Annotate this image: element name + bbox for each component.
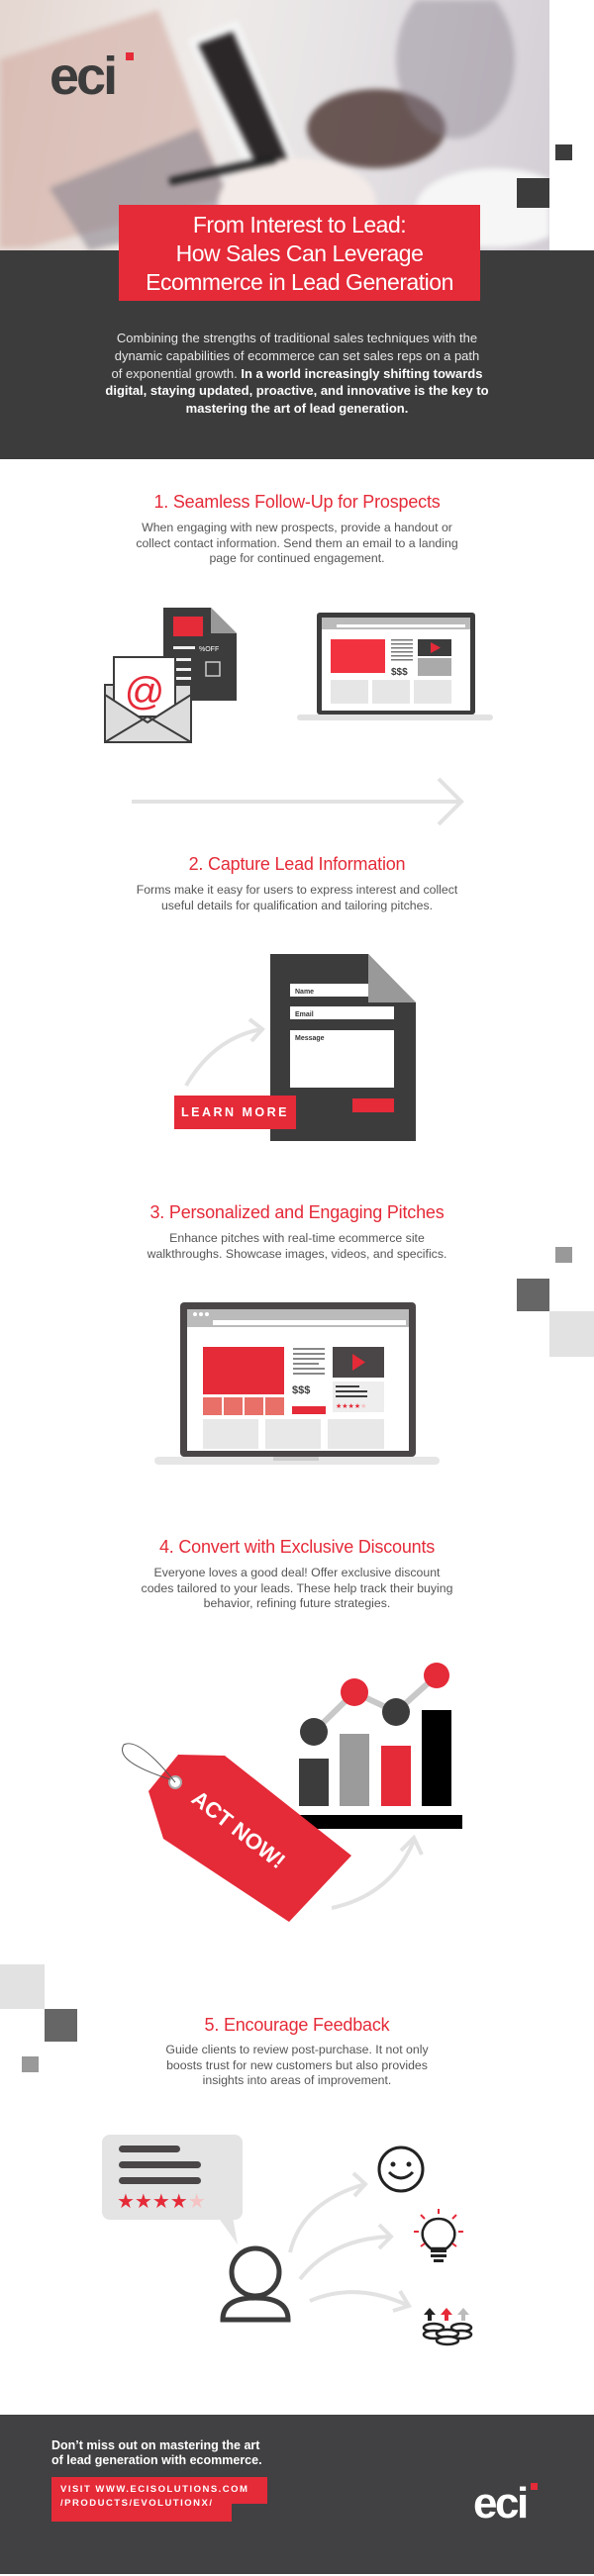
title box: How Sales Can Leverage xyxy=(176,240,423,266)
icon: form document: Name xyxy=(295,989,314,996)
text 4: codes tailored to your leads. These help track their buying xyxy=(142,1581,452,1595)
icon: lightbulb xyxy=(414,2209,463,2262)
icon: laptop showcase: $$$ xyxy=(292,1384,310,1396)
icon: coins growth xyxy=(422,2308,473,2345)
text 4: Everyone loves a good deal! Offer exclusive discount xyxy=(154,1566,440,1579)
heading 5: 5. Encourage Feedback xyxy=(205,2015,389,2035)
text 5: Guide clients to review post-purchase. It not only xyxy=(165,2043,429,2056)
title box: Ecommerce in Lead Generation xyxy=(146,269,453,295)
intro text: Combining the strengths of traditional sales techniques with the xyxy=(117,331,477,345)
heading 4: 4. Convert with Exclusive Discounts xyxy=(159,1537,435,1557)
icon: laptop showcase xyxy=(154,1302,440,1465)
icon: smile xyxy=(378,2146,424,2193)
speech bubble xyxy=(102,2135,243,2244)
icon: email and flyer: %OFF xyxy=(199,646,219,653)
icon: email and flyer: @ xyxy=(125,670,164,714)
footer logo: eci xyxy=(473,2479,527,2528)
footer text: of lead generation with ecommerce. xyxy=(51,2452,262,2466)
intro text: digital, staying updated, proactive, and innovative is the key to xyxy=(105,383,489,398)
intro text: of exponential growth. In a world increasingly shifting towards xyxy=(112,366,482,381)
title box: From Interest to Lead: xyxy=(193,212,406,238)
button: learn more: LEARN MORE xyxy=(181,1105,289,1119)
title box xyxy=(119,205,480,301)
icon: laptop landing page: $$$ xyxy=(391,667,408,678)
heading 2: 2. Capture Lead Information xyxy=(189,854,405,874)
icon: laptop showcase: ★★★★★ xyxy=(336,1402,366,1410)
person xyxy=(223,2248,288,2320)
icon: email and flyer xyxy=(104,608,237,743)
text 1: collect contact information. Send them an email to a landing xyxy=(136,536,458,550)
button: visit url: /PRODUCTS/EVOLUTIONX/ xyxy=(60,2498,213,2509)
text 2 xyxy=(137,883,457,912)
text 5 xyxy=(165,2043,429,2087)
text 5: insights into areas of improvement. xyxy=(203,2073,391,2087)
icon: form document: Message xyxy=(295,1035,325,1042)
heading 3: 3. Personalized and Engaging Pitches xyxy=(149,1202,444,1222)
feedback illustration xyxy=(102,2135,412,2322)
text 3: Enhance pitches with real-time ecommerce site xyxy=(169,1231,425,1245)
text 4 xyxy=(142,1566,452,1610)
footer xyxy=(0,2415,594,2574)
hero photo xyxy=(0,0,549,250)
dark intro band xyxy=(0,250,594,459)
deco squares right xyxy=(517,1247,594,1357)
text 3: walkthroughs. Showcase images, videos, and specifics. xyxy=(148,1247,446,1261)
footer text xyxy=(51,2438,262,2466)
icon: form document xyxy=(174,954,416,1141)
text 2: Forms make it easy for users to express interest and collect xyxy=(137,883,457,897)
button: learn more xyxy=(174,1096,296,1129)
intro text: mastering the art of lead generation. xyxy=(186,401,408,416)
chart and tag xyxy=(122,1663,462,1922)
icon: form document: Email xyxy=(295,1011,314,1018)
chart bars xyxy=(292,1663,462,1829)
arrows xyxy=(290,2173,409,2311)
deco squares left xyxy=(0,1964,77,2072)
text 1: page for continued engagement. xyxy=(209,551,385,565)
text 4: behavior, refining future strategies. xyxy=(204,1596,390,1610)
logo: eci xyxy=(50,47,115,106)
speech bubble: ★★★★★ xyxy=(117,2189,206,2213)
deco squares top xyxy=(517,144,572,208)
tag xyxy=(123,1744,351,1922)
text 2: useful details for qualification and tailoring pitches. xyxy=(161,899,433,912)
footer text: Don’t miss out on mastering the art xyxy=(51,2438,259,2452)
arrow up curve xyxy=(332,1841,414,1908)
arrow right xyxy=(132,778,463,825)
text 5: boosts trust for new customers but also provides xyxy=(166,2058,428,2072)
button: visit url xyxy=(51,2477,267,2522)
button: visit url: VISIT WWW.ECISOLUTIONS.COM xyxy=(60,2484,248,2495)
heading 1: 1. Seamless Follow-Up for Prospects xyxy=(153,492,441,512)
text 1 xyxy=(136,521,458,565)
text 3 xyxy=(147,1231,446,1261)
text 1: When engaging with new prospects, provide a handout or xyxy=(142,521,452,534)
intro text xyxy=(105,331,489,416)
tag: ACT NOW! xyxy=(187,1785,290,1873)
icon: laptop landing page xyxy=(297,613,493,720)
intro text: dynamic capabilities of ecommerce can set sales reps on a path xyxy=(115,348,479,363)
